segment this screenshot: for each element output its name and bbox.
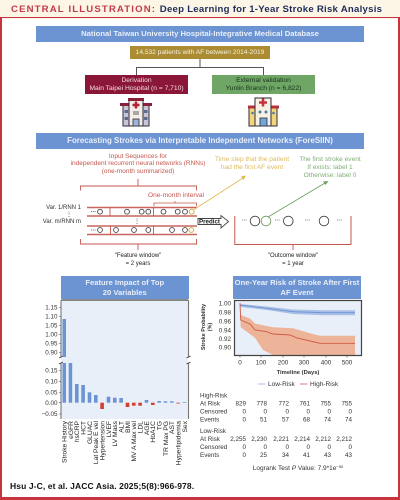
y axis ticks: 1.15 bbox=[45, 304, 58, 312]
sequence row 1 bbox=[87, 208, 197, 216]
variable labels: Hyperlipidemia bbox=[175, 421, 182, 465]
variable labels: HbA1C bbox=[150, 421, 157, 443]
risk table: 0 bbox=[263, 444, 267, 451]
heading: database: National Taiwan University Hospital-Integrative Medical Database bbox=[81, 29, 319, 38]
citation: Hsu J-C, et al. JACC Asia. 2025;5(8):966-978. bbox=[10, 481, 194, 491]
variable labels: eGFR bbox=[68, 421, 75, 439]
text: feature window: = 2 years bbox=[126, 261, 150, 267]
variable labels: Lat Peak E vel bbox=[93, 420, 100, 464]
heading: one-year risk: One-Year Risk of Stroke After First bbox=[235, 278, 359, 287]
risk table: 74 bbox=[345, 416, 352, 424]
text: variable labels: Var. m/RNN m bbox=[43, 219, 81, 225]
y axis ticks: 0.90 bbox=[45, 350, 58, 356]
text: outcome window: "Outcome window" bbox=[268, 253, 318, 259]
risk table bbox=[200, 392, 352, 459]
y axis ticks: 0.15 bbox=[45, 368, 58, 374]
y axis ticks: 0.05 bbox=[45, 390, 58, 396]
variable labels: hsCRP bbox=[74, 420, 81, 442]
text: variable labels bbox=[42, 204, 81, 225]
one-month bracket bbox=[154, 201, 196, 206]
bars bbox=[62, 319, 186, 403]
legend bbox=[258, 381, 339, 388]
sequence row m: ⋮ bbox=[134, 219, 140, 225]
y axis ticks: 1.00 bbox=[45, 332, 58, 338]
x axis: 500 bbox=[342, 360, 353, 366]
logrank test: Logrank Test P Value: 7.9*1e bbox=[253, 465, 336, 472]
variable labels: Sex bbox=[182, 420, 189, 433]
risk table: 43 bbox=[324, 452, 331, 459]
risk table: 2,212 bbox=[315, 436, 331, 443]
box: external validation: Yunlin Branch (n = 6,822) bbox=[226, 85, 301, 92]
variable labels: AGE bbox=[144, 420, 151, 435]
box: external validation bbox=[212, 75, 315, 94]
risk table: Censored bbox=[200, 408, 228, 416]
logrank test: −50 bbox=[336, 464, 344, 469]
y axis ticks: 1.10 bbox=[45, 314, 58, 320]
y axis: 0.92 bbox=[219, 336, 231, 343]
variable labels: ALT bbox=[118, 421, 125, 433]
risk table: 772 bbox=[278, 400, 289, 408]
risk table: 51 bbox=[260, 416, 267, 424]
header band bbox=[0, 0, 400, 19]
arrow: stroke event bbox=[268, 181, 328, 217]
y axis ticks: 0.00 bbox=[45, 400, 58, 407]
variable labels: AST bbox=[169, 421, 176, 434]
x axis: 0 bbox=[238, 360, 242, 366]
x axis: 200 bbox=[278, 360, 289, 366]
risk table: Low-Risk bbox=[200, 428, 227, 435]
variable labels: HCT bbox=[80, 421, 87, 435]
heading: feature impact bbox=[61, 276, 188, 299]
risk table: 0 bbox=[306, 444, 310, 451]
risk table: 68 bbox=[303, 416, 310, 424]
sequence row m bbox=[87, 219, 197, 234]
risk table: Events bbox=[200, 416, 219, 424]
text: first stroke event bbox=[299, 156, 361, 179]
variable labels: Stroke History bbox=[62, 420, 68, 463]
heading: ForeSIIN bbox=[36, 132, 364, 149]
axis titles: Stroke Probability bbox=[201, 304, 207, 350]
heading: one-year risk: AF Event bbox=[281, 288, 313, 297]
text: first stroke event: If exists: label 1 bbox=[307, 164, 353, 171]
variable labels: LV Mass bbox=[112, 420, 119, 447]
box: derivation: Main Taipei Hospital (n = 7,710) bbox=[89, 85, 184, 92]
risk table: 41 bbox=[303, 452, 310, 459]
risk table: 2,212 bbox=[336, 436, 352, 443]
text: input sequences: (one-month summarized) bbox=[102, 168, 174, 175]
text: input sequences bbox=[71, 152, 205, 175]
line chart: stroke risk: Timeline (Days) bbox=[277, 370, 319, 376]
risk table: At Risk bbox=[200, 436, 221, 443]
legend: High-Risk bbox=[310, 381, 339, 388]
risk table: 0 bbox=[348, 408, 352, 416]
text: outcome window: = 1 year bbox=[282, 261, 304, 267]
risk table: 0 bbox=[263, 408, 267, 416]
arrow: predict bbox=[198, 216, 228, 228]
risk table: 0 bbox=[242, 416, 246, 424]
x axis: 100 bbox=[256, 360, 267, 366]
text: input sequences: Input Sequences for bbox=[109, 152, 167, 160]
variable labels: Hypertension bbox=[99, 421, 106, 460]
risk table: At Risk bbox=[200, 400, 221, 408]
risk table: Events bbox=[200, 452, 219, 459]
risk table: 0 bbox=[242, 408, 246, 416]
variable labels bbox=[62, 420, 189, 465]
variable labels: TG bbox=[156, 421, 163, 430]
arrow: predict: Predict bbox=[199, 218, 220, 226]
text: first stroke event: Otherwise: label 0 bbox=[304, 172, 356, 179]
risk table: 25 bbox=[260, 452, 267, 459]
icon: main hospital bbox=[120, 98, 152, 126]
risk table: 0 bbox=[242, 452, 246, 459]
text: feature window: "Feature window" bbox=[115, 253, 161, 259]
risk table: 43 bbox=[345, 452, 352, 459]
risk table: 0 bbox=[242, 444, 246, 451]
y axis bbox=[219, 300, 231, 352]
risk table: 0 bbox=[306, 408, 310, 416]
text: first stroke event: The first stroke event bbox=[299, 156, 361, 163]
heading: one-year risk bbox=[233, 276, 361, 299]
risk table: 2,214 bbox=[294, 436, 310, 443]
risk table: 34 bbox=[282, 452, 289, 459]
heading: feature impact: Feature Impact of Top bbox=[85, 278, 164, 287]
y axis ticks: 0.10 bbox=[45, 378, 58, 386]
risk table: 829 bbox=[235, 400, 246, 408]
line chart: stroke risk bbox=[201, 300, 362, 376]
bar chart: feature impact bbox=[42, 300, 190, 465]
y axis: 0.94 bbox=[219, 328, 231, 334]
risk table: 2,221 bbox=[273, 436, 289, 443]
x axis: 300 bbox=[299, 360, 310, 366]
x axis bbox=[238, 360, 353, 366]
risk table: High-Risk bbox=[200, 392, 228, 400]
text: outcome window bbox=[268, 252, 318, 267]
arrow: AF event bbox=[194, 176, 246, 210]
y axis: 0.90 bbox=[219, 344, 231, 352]
risk table: 74 bbox=[324, 416, 331, 424]
text: feature window bbox=[115, 252, 161, 267]
box: patients: 14,532 patients with AF between 2014-2019 bbox=[136, 49, 264, 56]
text: first AF event: had the first AF event bbox=[221, 164, 283, 171]
y axis ticks bbox=[42, 304, 58, 418]
variable labels: BMI bbox=[125, 421, 132, 433]
y axis: 0.96 bbox=[219, 318, 231, 326]
risk table: 0 bbox=[285, 408, 289, 416]
risk table: 0 bbox=[327, 444, 331, 451]
feature window bracket top bbox=[80, 179, 196, 190]
feature window bracket bottom bbox=[80, 239, 196, 250]
risk table: 761 bbox=[299, 400, 310, 408]
outcome window bbox=[235, 216, 351, 250]
legend: Low-Risk bbox=[268, 381, 295, 388]
risk table: 2,230 bbox=[251, 436, 267, 443]
risk table: 0 bbox=[285, 444, 289, 451]
title: CENTRAL ILLUSTRATION: Deep Learning for 1-Year Stroke Risk Analysis bbox=[11, 4, 382, 15]
risk table: 0 bbox=[348, 444, 352, 451]
text: one-month interval: One-month interval bbox=[148, 192, 204, 199]
text: input sequences: independent recurrent neural networks (RNNs) bbox=[71, 160, 205, 167]
y axis: 1.00 bbox=[219, 300, 231, 308]
icon: branch hospital bbox=[248, 98, 279, 126]
box: derivation bbox=[85, 75, 188, 94]
y axis ticks: −0.05 bbox=[42, 411, 58, 418]
variable labels: TR Max PG bbox=[163, 421, 170, 456]
risk table: 778 bbox=[256, 400, 267, 408]
variable labels: LVEF bbox=[106, 421, 113, 437]
y axis: 0.98 bbox=[219, 310, 231, 316]
box: external validation: External validation bbox=[236, 77, 291, 84]
connector tree bbox=[136, 59, 264, 75]
risk table: 0 bbox=[327, 408, 331, 416]
heading: feature impact: 20 Variables bbox=[103, 288, 147, 297]
y axis ticks: 0.95 bbox=[45, 340, 58, 348]
variable labels: MV A Max vel bbox=[131, 420, 138, 462]
text: first AF event: Time step that the patient bbox=[215, 156, 289, 163]
variable labels: LDL bbox=[137, 421, 144, 433]
risk table: 57 bbox=[282, 416, 289, 424]
variable labels: GLUAC bbox=[87, 421, 94, 444]
text: variable labels: ⋮ bbox=[66, 212, 72, 218]
line chart: stroke risk: (%) bbox=[208, 323, 214, 331]
box: patients bbox=[130, 46, 270, 59]
risk table: 755 bbox=[320, 400, 331, 408]
x axis: 400 bbox=[321, 360, 332, 366]
y axis ticks: 1.05 bbox=[45, 322, 58, 330]
box: derivation: Derivation bbox=[121, 77, 152, 84]
text: first AF event bbox=[215, 156, 290, 171]
heading: ForeSIIN: Forecasting Strokes via Interpretable Independent Networks (ForeSIIN) bbox=[67, 136, 333, 144]
heading: database bbox=[36, 26, 364, 42]
risk table: 755 bbox=[341, 400, 352, 408]
risk table: 2,255 bbox=[230, 436, 246, 443]
risk table: Censored bbox=[200, 444, 228, 451]
text: variable labels: Var. 1/RNN 1 bbox=[46, 205, 81, 211]
